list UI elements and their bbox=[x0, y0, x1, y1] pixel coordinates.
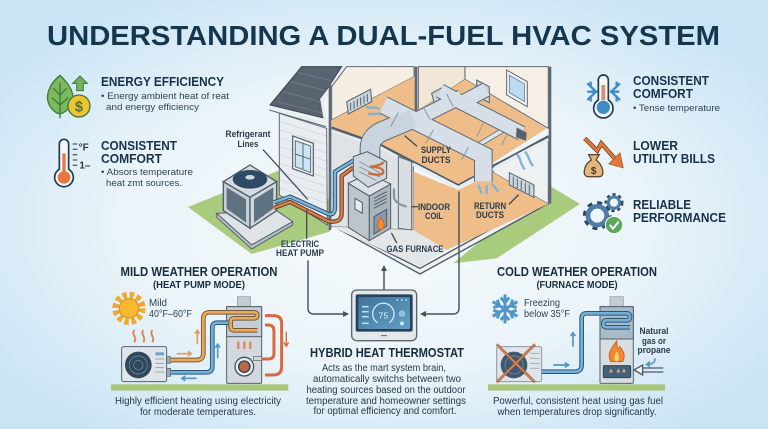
icon: leaf and coin bbox=[47, 75, 90, 118]
outdoor condenser unit bbox=[217, 165, 293, 249]
icon: thermometer: 1– bbox=[79, 161, 91, 172]
text: consistent comfort left: • Absors temperature bbox=[101, 167, 193, 178]
text: energy efficiency: and energy efficiency bbox=[106, 102, 199, 113]
label: return ducts: RETURN bbox=[474, 201, 506, 211]
text: energy efficiency: ENERGY EFFICIENCY bbox=[101, 74, 224, 89]
text: mild temperature bbox=[149, 298, 192, 320]
garage floor bbox=[332, 227, 447, 267]
icon: smart thermostat bbox=[352, 290, 417, 341]
text: reliable performance: PERFORMANCE bbox=[633, 210, 726, 225]
label: return ducts: DUCTS bbox=[476, 210, 504, 220]
text: consistent comfort right: • Tense temperature bbox=[633, 103, 720, 114]
icon: leaf and coin: $ bbox=[75, 99, 83, 115]
text: freezing temperature: Freezing bbox=[524, 298, 560, 309]
pipes bbox=[171, 312, 257, 372]
label: supply ducts bbox=[421, 145, 451, 165]
label: electric heat pump: HEAT PUMP bbox=[276, 248, 324, 258]
icon: smart thermostat: 75 bbox=[379, 311, 388, 321]
label: electric heat pump bbox=[276, 239, 324, 258]
flow arrows bbox=[553, 333, 655, 367]
text: natural gas bbox=[638, 326, 670, 355]
text: thermostat description bbox=[306, 363, 466, 417]
warm air arrows bbox=[262, 316, 282, 375]
label: gas furnace: GAS FURNACE bbox=[386, 244, 444, 254]
blue pipe and coil bbox=[542, 313, 630, 372]
thin connecting duct bbox=[478, 130, 503, 145]
text: mild description: for moderate temperatures. bbox=[140, 407, 256, 418]
window bbox=[293, 136, 313, 176]
text: mild temperature: Mild bbox=[149, 298, 167, 309]
text: reliable performance: RELIABLE bbox=[633, 197, 691, 212]
icon: falling bills bbox=[584, 138, 623, 177]
label: indoor coil: COIL bbox=[425, 211, 443, 221]
text: lower utility bills: UTILITY BILLS bbox=[633, 151, 715, 166]
label leader lines bbox=[263, 136, 518, 243]
text: thermostat description: Acts as the mart system brain, bbox=[322, 363, 446, 374]
title: UNDERSTANDING A DUAL-FUEL HVAC SYSTEM bbox=[47, 20, 720, 51]
heading: mild weather bbox=[120, 265, 278, 291]
text: cold description: when temperatures drop significantly. bbox=[497, 407, 656, 418]
thermostat connection arrows bbox=[308, 192, 459, 317]
text: natural gas: Natural bbox=[640, 326, 668, 336]
furnace diagram bbox=[488, 294, 665, 391]
roof bbox=[269, 67, 347, 127]
label: indoor coil: INDOOR bbox=[418, 202, 450, 212]
text: energy efficiency bbox=[101, 74, 229, 113]
label: refrigerant lines: Refrigerant bbox=[226, 129, 270, 139]
siding wall bbox=[279, 113, 327, 225]
text: consistent comfort left: heat zmt sources. bbox=[106, 178, 182, 189]
text: thermostat description: heating sources based on the outdoor bbox=[306, 385, 466, 396]
condensate pipe bbox=[394, 188, 407, 207]
panel: mild weather operation bbox=[111, 265, 289, 418]
text: freezing temperature bbox=[524, 298, 570, 320]
heading: cold weather: COLD WEATHER OPERATION bbox=[497, 265, 657, 279]
label: supply ducts: SUPPLY bbox=[421, 145, 451, 155]
icon: snowflake bbox=[493, 294, 517, 323]
indoor unit bbox=[227, 297, 262, 383]
icon: cold thermometer bbox=[587, 75, 620, 118]
text: consistent comfort left: CONSISTENT bbox=[101, 138, 177, 153]
icon: gears with check bbox=[585, 195, 623, 234]
text: lower utility bills: LOWER bbox=[633, 138, 679, 153]
label: indoor coil bbox=[418, 202, 450, 221]
interior back walls bbox=[330, 67, 548, 230]
text: consistent comfort left: COMFORT bbox=[101, 151, 162, 166]
text: cold description: Powerful, consistent heat using gas fuel bbox=[493, 396, 663, 407]
text: reliable performance bbox=[633, 197, 726, 225]
furnace unit bbox=[600, 297, 633, 383]
heading: mild weather: (HEAT PUMP MODE) bbox=[153, 279, 245, 291]
room window bbox=[507, 70, 527, 107]
text: thermostat description: temperature and homeowner settings bbox=[306, 396, 466, 407]
text: consistent comfort right: CONSISTENT bbox=[633, 73, 709, 88]
text: freezing temperature: below 35°F bbox=[524, 309, 570, 320]
disabled outdoor unit bbox=[497, 344, 542, 382]
panel: thermostat bbox=[306, 290, 466, 417]
label: electric heat pump: ELECTRIC bbox=[281, 239, 319, 249]
flow arrows bbox=[177, 330, 220, 381]
heat waves bbox=[133, 330, 153, 342]
wall vents bbox=[347, 80, 534, 197]
outdoor unit bbox=[122, 347, 171, 382]
text: consistent comfort right bbox=[633, 73, 720, 114]
text: lower utility bills bbox=[633, 138, 715, 166]
panel: cold weather operation bbox=[488, 265, 670, 418]
panel: left benefits bbox=[47, 74, 229, 189]
ground bbox=[111, 384, 288, 391]
heading: hybrid heat thermostat: HYBRID HEAT THERMOSTAT bbox=[310, 346, 464, 360]
refrigerant lines bbox=[274, 161, 353, 222]
icon: falling bills: $ bbox=[591, 166, 597, 177]
text: cold description bbox=[493, 396, 663, 418]
text: mild description bbox=[115, 396, 281, 418]
lower floor bbox=[413, 172, 548, 250]
label: refrigerant lines bbox=[226, 129, 270, 149]
text: natural gas: propane bbox=[638, 345, 670, 355]
ground bbox=[488, 384, 665, 391]
text: thermostat description: automatically switchs between two bbox=[313, 374, 461, 385]
label: supply ducts: DUCTS bbox=[422, 155, 450, 165]
label: refrigerant lines: Lines bbox=[238, 139, 258, 149]
indoor furnace bbox=[348, 152, 391, 241]
label: return ducts bbox=[474, 201, 506, 220]
gas inlet arrow bbox=[634, 365, 663, 375]
text: consistent comfort left bbox=[101, 138, 193, 189]
icon: thermometer: °F bbox=[79, 142, 89, 153]
structural walls bbox=[330, 67, 550, 230]
heat pump diagram bbox=[111, 295, 289, 391]
text: mild description: Highly efficient heating using electricity bbox=[115, 396, 281, 407]
text: thermostat description: for optimal efficiency and comfort. bbox=[314, 406, 456, 417]
duct airflow arrows bbox=[366, 107, 533, 194]
supply ducts bbox=[370, 89, 527, 182]
panel: right benefits bbox=[584, 73, 726, 234]
house labels bbox=[226, 129, 506, 258]
text: mild temperature: 40°F–60°F bbox=[149, 309, 192, 320]
heading: cold weather: (FURNACE MODE) bbox=[536, 279, 618, 291]
text: energy efficiency: • Energy ambient heat of reat bbox=[101, 91, 229, 102]
icon: thermometer bbox=[55, 139, 91, 187]
upper floor bbox=[332, 77, 547, 185]
text: natural gas: gas or bbox=[642, 336, 666, 346]
icon: sun bbox=[116, 295, 142, 322]
heading: cold weather bbox=[497, 265, 657, 291]
lawn bbox=[188, 170, 580, 263]
house cutaway diagram bbox=[188, 67, 580, 274]
heading: mild weather: MILD WEATHER OPERATION bbox=[120, 265, 278, 279]
house foundation slab bbox=[329, 197, 550, 274]
text: consistent comfort right: COMFORT bbox=[633, 86, 693, 101]
